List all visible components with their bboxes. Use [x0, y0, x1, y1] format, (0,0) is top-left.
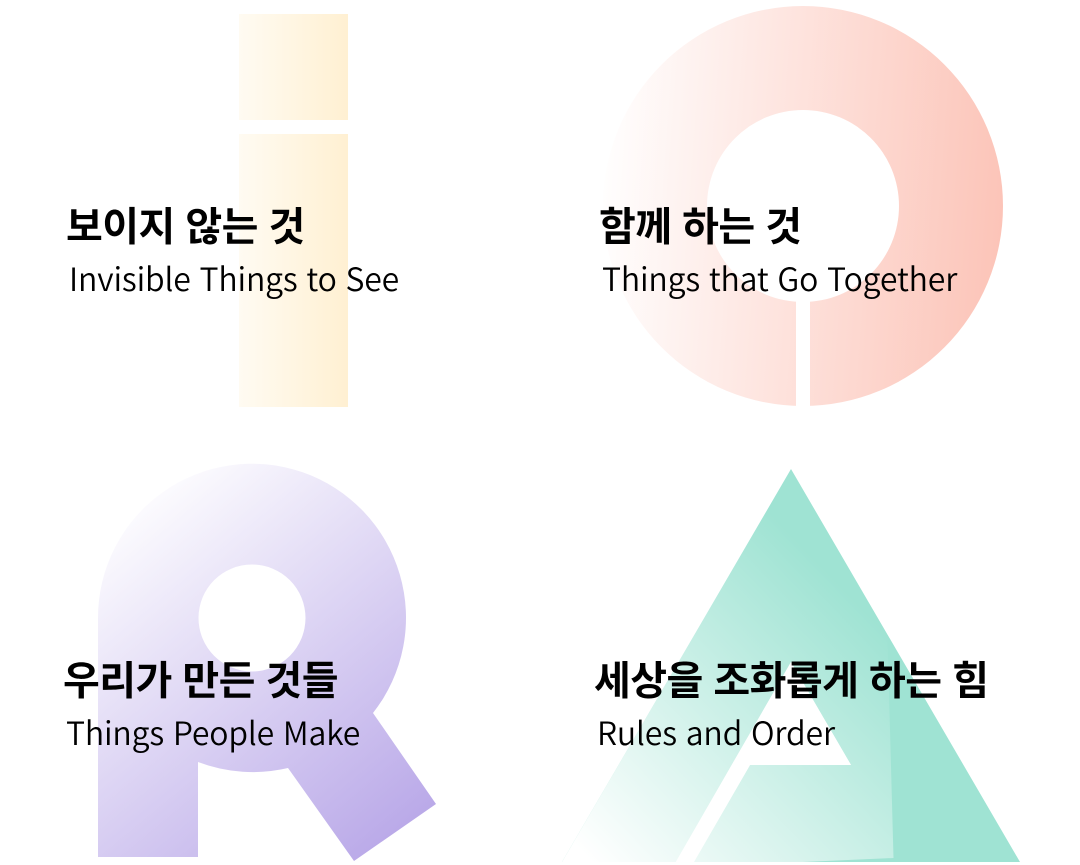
subheading: things people make: Things People Make: [66, 709, 360, 755]
icon: letter O ring shape: [603, 6, 1003, 410]
heading: rules and order: 세상을 조화롭게 하는 힘: [594, 648, 988, 706]
icon: letter i shape: [239, 14, 348, 407]
subheading: rules and order: Rules and Order: [597, 709, 836, 755]
heading: things that go together: 함께 하는 것: [599, 194, 802, 252]
icon: letter A triangle shape: [562, 469, 1020, 862]
subheading: invisible things: Invisible Things to See: [69, 255, 399, 301]
panel: rules and order: [562, 469, 1020, 862]
icon: letter R shape: [98, 464, 436, 861]
heading: invisible things: 보이지 않는 것: [66, 194, 305, 252]
subheading: things that go together: Things that Go Together: [602, 255, 958, 301]
panel: invisible things: [66, 14, 399, 407]
panel: things that go together: [599, 6, 1003, 410]
heading: things people make: 우리가 만든 것들: [63, 648, 338, 706]
panel: things people make: [63, 464, 436, 861]
